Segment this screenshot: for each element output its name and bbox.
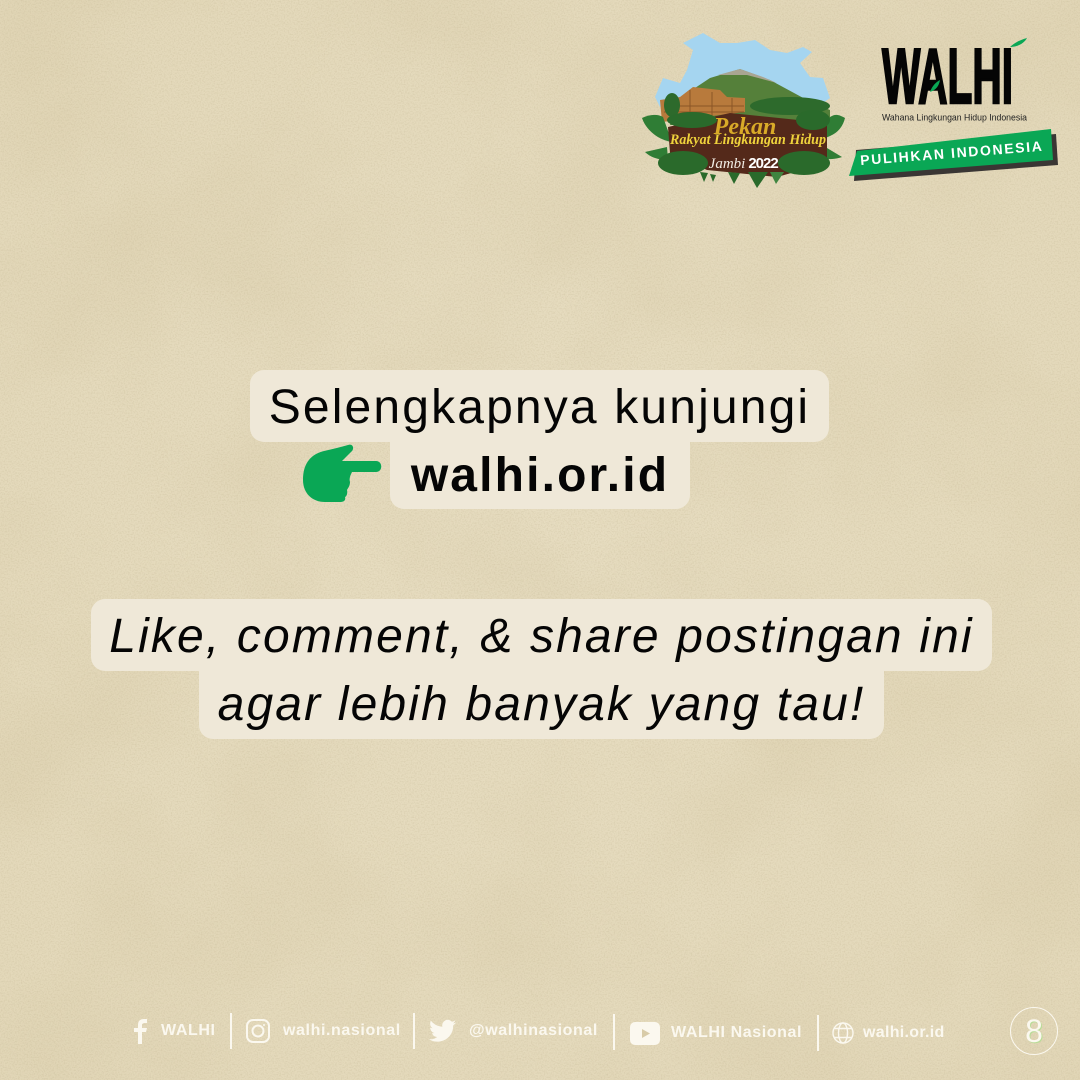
event name: Pekan xyxy=(713,114,776,140)
highlight: Like, comment, & share xyxy=(91,599,992,671)
foliage clusters xyxy=(658,110,830,188)
logo: Pekan Rakyat Lingkungan Hidup Jambi 2022: 2022 xyxy=(748,155,778,172)
foliage top xyxy=(664,93,830,117)
text: @walhinasional: @walhinasional xyxy=(469,1022,598,1039)
text: walhi.or.id: walhi.or.id xyxy=(411,449,669,502)
temple xyxy=(660,87,745,122)
banner: Pulihkan Indonesia: PULIHKAN INDONESIA xyxy=(860,138,1042,168)
logo: WALHI xyxy=(881,34,1028,124)
side leaves xyxy=(642,115,845,160)
sky splash xyxy=(655,33,830,107)
text: walhi.nasional: walhi.nasional xyxy=(283,1022,401,1039)
icon: instagram xyxy=(246,1019,270,1043)
wooden sign xyxy=(668,113,827,177)
highlight: agar lebih banyak yang tau xyxy=(199,669,884,739)
text: agar lebih banyak yang tau!: agar lebih banyak yang tau! xyxy=(218,678,865,731)
footer: social media links xyxy=(134,1013,945,1051)
icon: facebook xyxy=(134,1019,147,1044)
text: walhi.or.id: walhi.or.id xyxy=(863,1024,945,1041)
page number badge xyxy=(1010,1007,1058,1055)
logo: Pekan Rakyat Lingkungan Hidup Jambi 2022: Rakyat Lingkungan Hidup xyxy=(669,132,826,148)
icon: twitter xyxy=(429,1020,456,1042)
highlight: Selengkapnya kunjungi xyxy=(250,370,829,442)
text: WALHI: WALHI xyxy=(161,1022,216,1039)
text: WALHI Nasional: WALHI Nasional xyxy=(671,1024,802,1041)
text: Like, comment, & share postingan ini: Like, comment, & share postingan ini xyxy=(109,610,974,663)
leaf accent xyxy=(1010,38,1027,47)
logo: Pekan Rakyat Lingkungan Hidup Jambi 2022 xyxy=(642,33,845,188)
text: page number 8: 8 xyxy=(1025,1013,1043,1049)
highlight: walhi.or.id xyxy=(390,440,690,509)
banner: Pulihkan Indonesia xyxy=(849,129,1058,181)
icon: pointing hand xyxy=(303,444,382,502)
icon: youtube xyxy=(630,1022,660,1045)
text: Selengkapnya kunjungi: Selengkapnya kunjungi xyxy=(269,381,810,434)
logo: Pekan Rakyat Lingkungan Hidup Jambi 2022: Jambi xyxy=(709,156,745,172)
mountain xyxy=(670,69,830,125)
icon: globe xyxy=(832,1022,854,1044)
